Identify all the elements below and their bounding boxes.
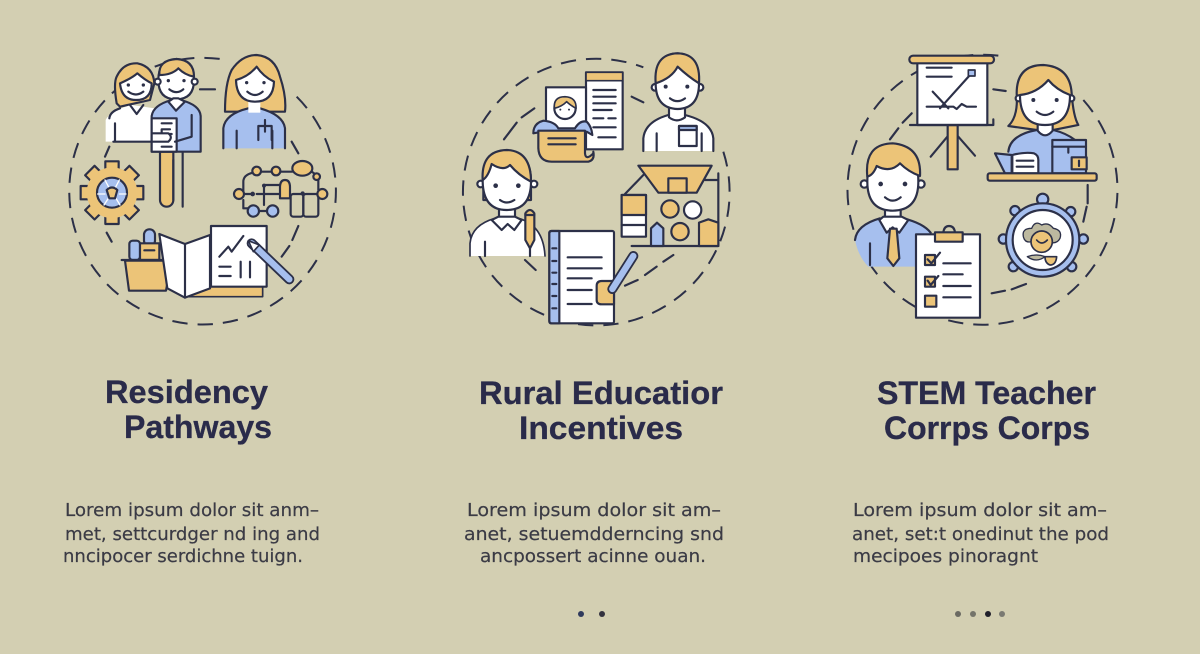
icon: student with pencil [470,150,545,256]
icon: flip chart presentation [909,56,994,169]
icon: clipboard checklist [916,226,980,318]
heading: Rural Education Incentives: Incentives [519,410,683,446]
body text: STEM Teacher Corps: anet, set:t onedinut the pod [852,524,1109,545]
heading: STEM Teacher Corps: Corrps Corps [884,410,1090,446]
icon: rural schoolhouse [622,166,718,246]
icon: folded map with chart and pencil [159,226,289,298]
body text: Rural Education Incentives: ancpossert acinne ouan. [480,546,706,567]
heading: STEM Teacher Corps [877,375,1096,446]
icon cluster: residency [69,55,336,324]
icon: man with document [152,59,201,207]
icon: process flow diagram [234,161,327,217]
icon: teacher at desk [988,65,1097,181]
icon: woman in blue [223,55,285,148]
body text: Residency Pathways: Lorem ipsum dolor sit anm– [65,500,319,521]
body text: Rural Education Incentives: Lorem ipsum dolor sit am– [467,500,721,521]
dashed ring [69,58,336,324]
icon: woman in white [106,63,155,142]
dashed ring [463,59,730,325]
heading: Residency Pathways: Pathways [124,409,272,445]
icon: documents with small portrait [533,72,623,162]
body text: Residency Pathways [63,500,320,567]
body text: Rural Education Incentives [464,500,724,567]
icon: emblem badge [999,194,1088,277]
body text: STEM Teacher Corps: Lorem ipsum dolor sit am– [853,500,1107,521]
icon cluster: rural education [463,53,730,325]
body text: Residency Pathways: met, settcurdger nd ing and [65,524,320,545]
body text: Residency Pathways: nncipocer serdichne tuign. [63,546,303,567]
heading: Rural Education Incentives: Rural Educatior [479,375,723,411]
body text: STEM Teacher Corps [852,500,1109,567]
pagination dots [578,611,605,617]
pagination dots [955,611,1005,617]
panel: STEM Teacher Corps [847,55,1117,617]
heading: Rural Education Incentives [479,375,723,446]
icon: gear with lightbulb [81,161,143,224]
icon: man with tie [855,143,932,267]
panel: Rural Education Incentives [463,53,730,617]
body text: Rural Education Incentives: anet, setuemdderncing snd [464,524,724,545]
dashed ring [847,55,1117,325]
icon cluster: STEM teacher [847,55,1117,325]
icon: notebook with pen [549,231,633,323]
body text: STEM Teacher Corps: mecipoes pinoragnt [853,546,1038,567]
heading: Residency Pathways [105,374,272,445]
icon: man in white [643,53,713,151]
heading: STEM Teacher Corps: STEM Teacher [877,375,1096,411]
heading: Residency Pathways: Residency [105,374,268,410]
icon: basket with supplies [122,229,176,291]
panel: Residency Pathways [63,55,336,567]
